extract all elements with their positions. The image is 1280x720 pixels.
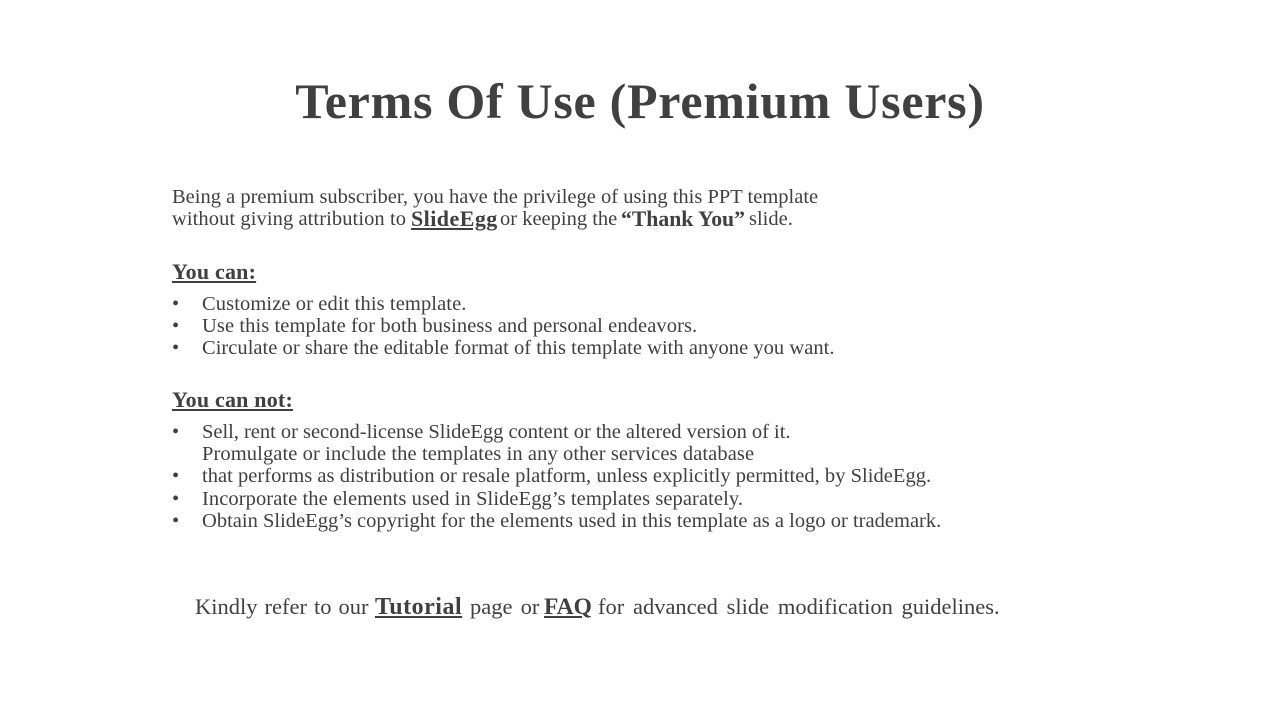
intro text block <box>172 186 818 231</box>
intro text block: without giving attribution to <box>172 208 406 230</box>
list: you can: Use this template for both business and personal endeavors. <box>202 315 697 337</box>
list: you can not: • <box>172 488 179 510</box>
list: you can not: • <box>172 510 179 532</box>
list: you can not: • <box>172 465 179 487</box>
list: you can not: that performs as distribution or resale platform, unless explicitly permitted, by SlideEgg. <box>202 465 931 487</box>
footer note: Tutorial <box>375 594 462 620</box>
footer note <box>195 594 1000 620</box>
list: you can: • <box>172 337 179 359</box>
list: you can: • <box>172 293 179 315</box>
list: you can not: Obtain SlideEgg’s copyright for the elements used in this template as a logo or trademark. <box>202 510 941 532</box>
list: you can not: • <box>172 421 179 443</box>
footer note: page or <box>470 594 539 619</box>
intro text block: or keeping the <box>500 208 617 230</box>
heading: you can not: You can not: <box>172 387 293 412</box>
intro text block: “Thank You” <box>621 207 745 231</box>
list: you can: • <box>172 315 179 337</box>
list: you can not: Sell, rent or second-license SlideEgg content or the altered version of it. <box>202 421 790 443</box>
heading: you can: You can: <box>172 259 256 284</box>
intro text block: slide. <box>749 208 793 230</box>
list: you can not: Promulgate or include the templates in any other services database <box>202 443 754 465</box>
list: you can <box>172 293 834 359</box>
intro text block: SlideEgg <box>411 206 498 231</box>
list: you can: Circulate or share the editable format of this template with anyone you want. <box>202 337 834 359</box>
list: you can not <box>172 421 941 532</box>
title: Terms Of Use (Premium Users) <box>295 73 985 129</box>
intro text block: Being a premium subscriber, you have the privilege of using this PPT template <box>172 186 818 208</box>
footer note: Kindly refer to our <box>195 594 369 619</box>
footer note: for advanced slide modification guidelines. <box>598 594 1000 619</box>
list: you can not: Incorporate the elements used in SlideEgg’s templates separately. <box>202 488 743 510</box>
list: you can: Customize or edit this template. <box>202 293 467 315</box>
footer note: FAQ <box>544 594 592 620</box>
